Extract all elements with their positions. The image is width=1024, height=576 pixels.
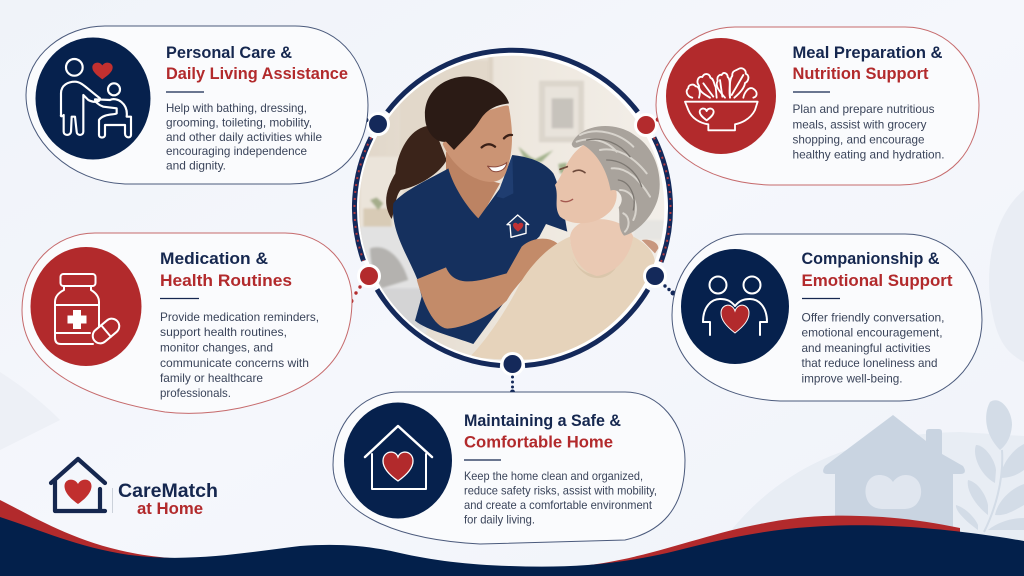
panel: medication <box>22 233 352 413</box>
senior neck and face <box>570 219 633 276</box>
text block: reduce safety risks, assist with mobility, <box>464 484 657 498</box>
woman ponytail <box>386 126 447 219</box>
node: companionship <box>643 264 676 296</box>
text block: monitor changes, and <box>160 342 273 354</box>
text block: and dignity. <box>166 160 226 172</box>
heading: Health Routines <box>160 271 292 290</box>
text block <box>802 312 944 386</box>
node: medication <box>348 264 381 304</box>
panel: meal preparation <box>656 27 979 185</box>
heading: Comfortable Home <box>464 432 613 452</box>
text block: encouraging independence <box>166 145 307 158</box>
woman eyes and smile <box>482 135 512 147</box>
watermark: house and leaves <box>823 400 1024 532</box>
text block <box>166 102 322 172</box>
photo ring backing <box>354 50 670 366</box>
heading: Nutrition Support <box>792 64 929 83</box>
polo logo <box>507 215 529 237</box>
node: meal preparation <box>634 113 660 137</box>
logo: CareMatch at Home <box>51 459 218 518</box>
heading <box>166 43 348 83</box>
senior sweater <box>470 237 655 360</box>
icon: house with heart <box>344 402 452 518</box>
text block: Provide medication reminders, <box>160 311 319 324</box>
text block: healthy eating and hydration. <box>792 148 944 162</box>
text block: and meaningful activities <box>802 342 931 355</box>
senior far hand <box>642 240 658 253</box>
heading: Maintaining a Safe & <box>464 411 621 430</box>
heading <box>464 411 621 452</box>
text block: and create a comfortable environment <box>464 499 653 512</box>
heading: Medication & <box>160 249 268 268</box>
senior hair <box>572 126 660 236</box>
text block: and other daily activities while <box>166 131 322 144</box>
woman face <box>443 105 512 182</box>
text block: communicate concerns with <box>160 357 309 370</box>
heading: Meal Preparation & <box>792 43 942 62</box>
heading: Emotional Support <box>802 271 953 290</box>
text block <box>464 470 657 526</box>
woman hair <box>425 77 509 150</box>
central photo: caregiver with senior <box>353 50 670 367</box>
text block: family or healthcare <box>160 372 263 385</box>
text block: Plan and prepare nutritious <box>792 103 935 116</box>
logo: CareMatch at Home: at Home <box>137 499 203 518</box>
text block: Help with bathing, dressing, <box>166 102 307 115</box>
arm <box>417 239 557 329</box>
text block: for daily living. <box>464 514 535 526</box>
text block: emotional encouragement, <box>802 326 942 340</box>
icon: caregiver helping person <box>36 38 150 160</box>
icon: logo house <box>51 459 105 511</box>
heading <box>802 249 953 290</box>
icon: salad bowl <box>666 38 776 154</box>
text block <box>160 311 319 400</box>
neck <box>446 152 500 220</box>
panel: personal care <box>26 26 368 184</box>
logo: CareMatch at Home: CareMatch <box>118 481 218 502</box>
panel: companionship <box>672 234 982 401</box>
heading: Personal Care & <box>166 43 292 62</box>
text block: grooming, toileting, mobility, <box>166 116 312 130</box>
text block: support health routines, <box>160 326 287 339</box>
text block <box>792 103 944 162</box>
text block: Offer friendly conversation, <box>802 312 944 324</box>
panel: safe home <box>333 392 685 544</box>
text block: Keep the home clean and organized, <box>464 470 643 483</box>
text block: that reduce loneliness and <box>802 357 938 370</box>
node: safe home <box>500 352 524 394</box>
heading: Daily Living Assistance <box>166 64 348 83</box>
polo <box>393 155 567 344</box>
heading <box>792 43 942 83</box>
heading <box>160 249 292 290</box>
icon: two people with heart <box>681 249 789 364</box>
bottom wave <box>0 500 1024 576</box>
text block: improve well-being. <box>802 372 902 386</box>
photo ring with connector nodes <box>348 50 676 395</box>
heading: Companionship & <box>802 249 940 268</box>
text block: shopping, and encourage <box>792 134 924 146</box>
icon: pill bottle <box>30 247 142 366</box>
node: personal care <box>364 112 390 136</box>
text block: meals, assist with grocery <box>792 118 927 132</box>
text block: professionals. <box>160 387 231 400</box>
